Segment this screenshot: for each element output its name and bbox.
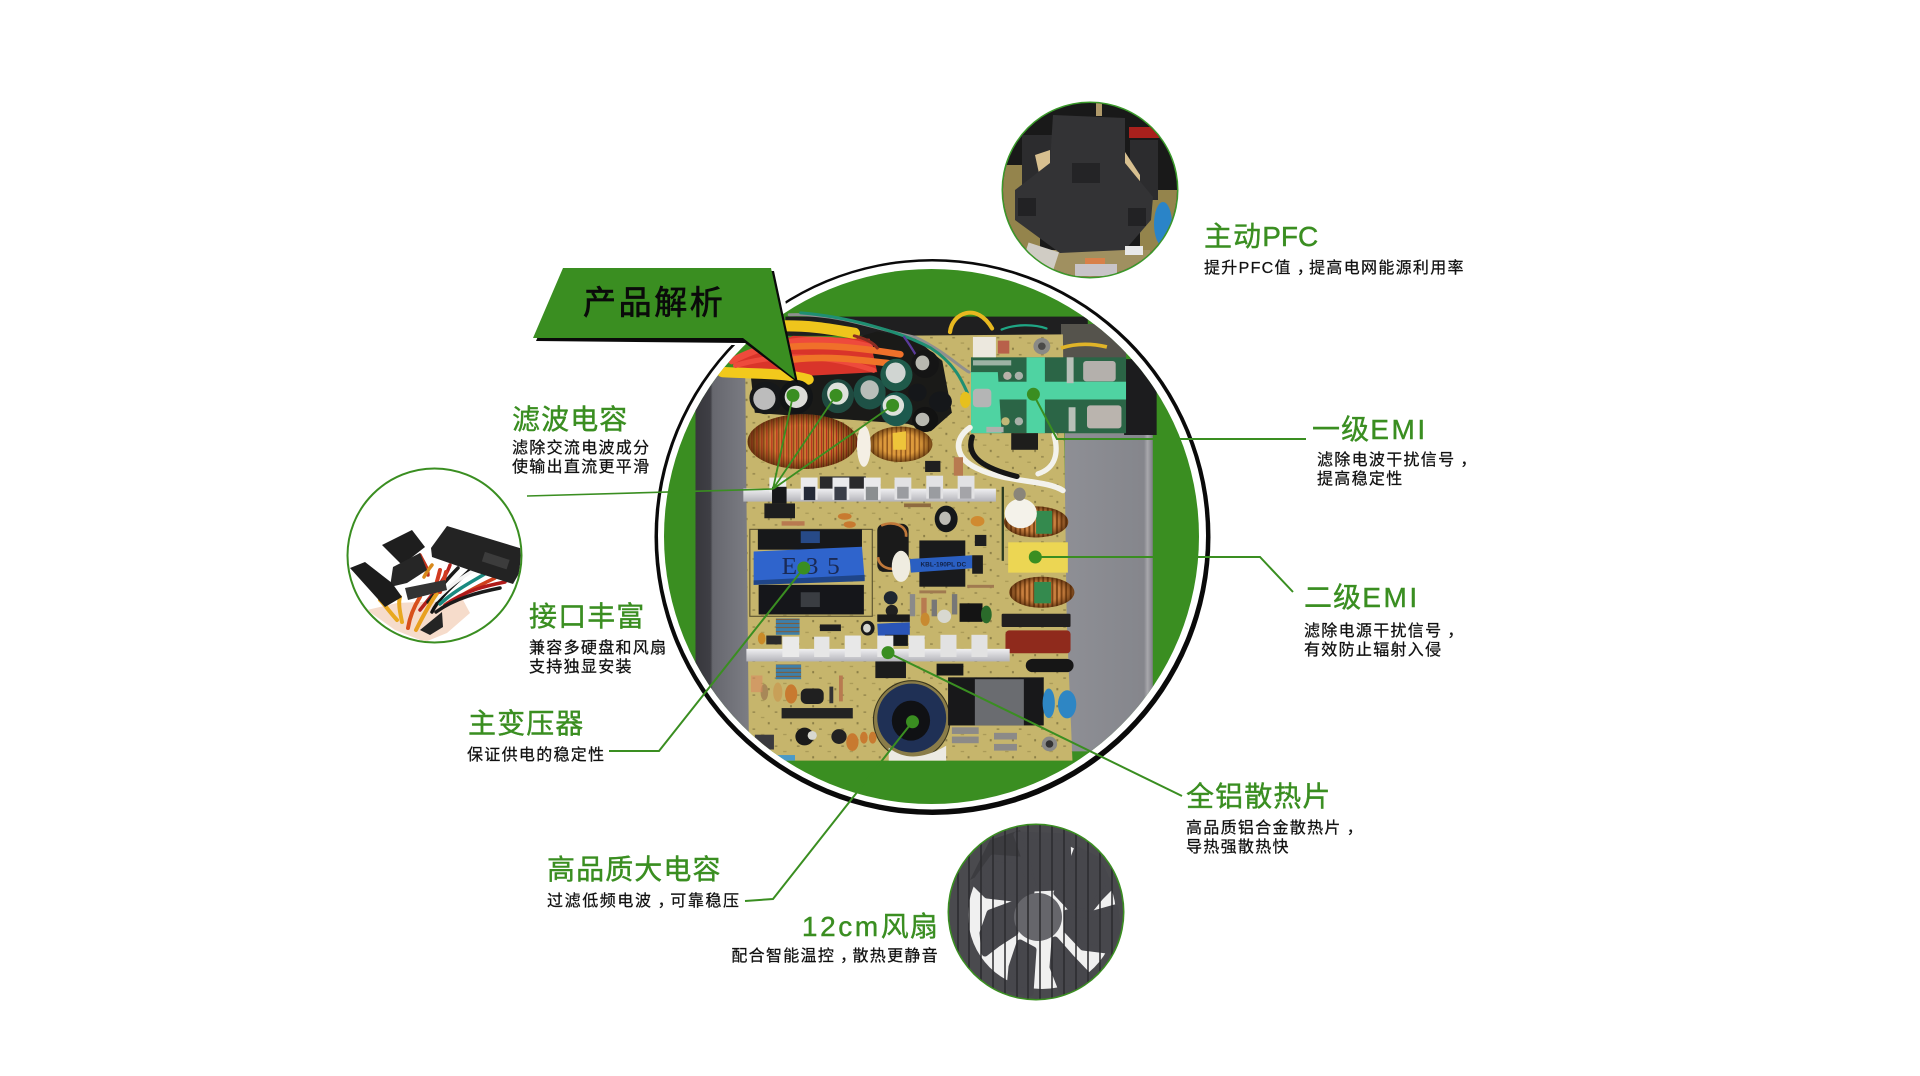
circuit board base — [745, 334, 1072, 761]
description: first EMI: 提高稳定性 — [1317, 471, 1404, 488]
fan guard bars — [958, 824, 1112, 1000]
heading: rich connectors: 接口丰富 — [529, 601, 645, 632]
fan hub — [1014, 893, 1062, 941]
banner white halo over ring — [533, 268, 795, 379]
hand — [367, 600, 470, 642]
main circle: black ring — [654, 259, 1210, 815]
callout: first EMI — [1312, 414, 1478, 488]
right grey chassis panel — [1065, 433, 1153, 751]
blue ceramic capacitors — [1043, 688, 1076, 718]
wires: yellow red orange bundle — [722, 313, 1046, 392]
24-pin block — [431, 526, 523, 584]
auxiliary transformer with blue label — [877, 523, 983, 587]
description: aluminium heatsink — [1186, 819, 1364, 856]
description: filter capacitors: 使输出直流更平滑 — [512, 459, 650, 476]
white and black mains wires — [959, 428, 1063, 490]
large primary capacitor — [873, 681, 950, 761]
callout: second EMI — [1304, 582, 1465, 659]
upper green filter coil — [1004, 488, 1068, 537]
power supply board photo illustration — [695, 313, 1157, 761]
infographic canvas — [346, 102, 1466, 1000]
leader line and dot: first EMI — [1027, 388, 1306, 439]
inset circle: active PFC choke — [1000, 100, 1180, 285]
fan blades — [975, 835, 1117, 993]
SATA connectors — [350, 562, 402, 607]
leader line and dot: second EMI — [1029, 550, 1293, 592]
white connector and screw — [973, 337, 1107, 357]
banner: product analysis — [533, 268, 798, 383]
leader line and dots: filter capacitors — [527, 389, 899, 496]
cables — [380, 555, 505, 630]
right black chassis block — [1124, 359, 1157, 435]
main copper toroid coil — [748, 414, 932, 469]
description: second EMI — [1304, 622, 1465, 659]
E35 main transformer: E35 — [782, 553, 840, 580]
description: main transformer: 保证供电的稳定性 — [467, 747, 605, 764]
leader line and dot: main transformer — [609, 562, 810, 751]
lower board parts — [751, 676, 1057, 761]
description: rich connectors: 支持独显安装 — [529, 659, 633, 676]
Molex connector — [382, 530, 425, 565]
callout: rich connectors — [529, 601, 667, 676]
callout: filter capacitors — [512, 404, 650, 476]
callout: active PFC — [1204, 221, 1465, 277]
lower green filter coil — [1009, 577, 1074, 608]
blue resistors and small parts — [758, 619, 910, 679]
standby transformer — [948, 677, 1044, 725]
heading: first EMI: 一级EMI — [1312, 414, 1428, 445]
description: active PFC: 提升PFC值 ，提高电网能源利用率 — [1204, 260, 1465, 277]
inset circle: connectors and cables — [348, 468, 523, 642]
description: large capacitor: 过滤低频电波 ，可靠稳压 — [547, 893, 741, 910]
heading: second EMI: 二级EMI — [1304, 582, 1420, 613]
description: rich connectors: 兼容多硬盘和风扇 — [529, 640, 667, 657]
callout: aluminium heatsink — [1186, 781, 1364, 856]
leader line and dot: heatsink — [882, 646, 1182, 796]
filter capacitors — [749, 350, 971, 432]
heading: filter capacitors: 滤波电容 — [512, 404, 628, 435]
description: first EMI — [1317, 451, 1478, 488]
upper heatsink — [743, 476, 996, 518]
heading: active PFC: 主动PFC — [1204, 221, 1318, 252]
dark area behind the wires and capacitors — [751, 334, 952, 432]
description: second EMI: 滤除电源干扰信号 ， — [1304, 623, 1465, 640]
description: aluminium heatsink: 高品质铝合金散热片 ， — [1186, 820, 1364, 837]
left grey chassis panel — [695, 376, 749, 761]
description: filter capacitors — [512, 439, 650, 476]
callout: main transformer — [467, 708, 605, 764]
heading: main transformer: 主变压器 — [468, 708, 584, 739]
EMI filter board — [971, 357, 1126, 433]
heading: 12cm fan: 12cm风扇 — [802, 911, 939, 942]
lower heatsink — [746, 635, 1010, 678]
inset circle: 12cm fan — [948, 824, 1124, 1000]
callout: large capacitor — [547, 854, 741, 910]
top dark chassis edge — [785, 317, 1088, 336]
banner heading: 产品解析 — [583, 284, 725, 321]
auxiliary transformer with blue label: KBL-190PL DC — [921, 562, 967, 569]
description: 12cm fan: 配合智能温控 ，散热更静音 — [731, 948, 939, 965]
description: first EMI: 滤除电波干扰信号 ， — [1317, 452, 1478, 469]
heading: large capacitor: 高品质大电容 — [547, 854, 722, 885]
description: aluminium heatsink: 导热强散热快 — [1186, 839, 1290, 856]
yellow X capacitor — [1008, 542, 1068, 573]
leader line and dot: large capacitor — [745, 715, 919, 901]
artwork: circles, photo illustrations and leader lines — [346, 102, 1306, 1000]
heading: aluminium heatsink: 全铝散热片 — [1186, 781, 1332, 812]
main circle: green disc — [664, 269, 1199, 804]
description: filter capacitors: 滤除交流电波成分 — [512, 440, 650, 457]
red wire mass — [734, 336, 877, 376]
description: second EMI: 有效防止辐射入侵 — [1304, 642, 1442, 659]
callout: 12cm fan — [731, 911, 939, 965]
black and red film capacitors — [1002, 614, 1074, 672]
E35 main transformer — [750, 529, 872, 616]
small components on the upper board — [782, 457, 1004, 636]
description: rich connectors — [529, 639, 667, 676]
